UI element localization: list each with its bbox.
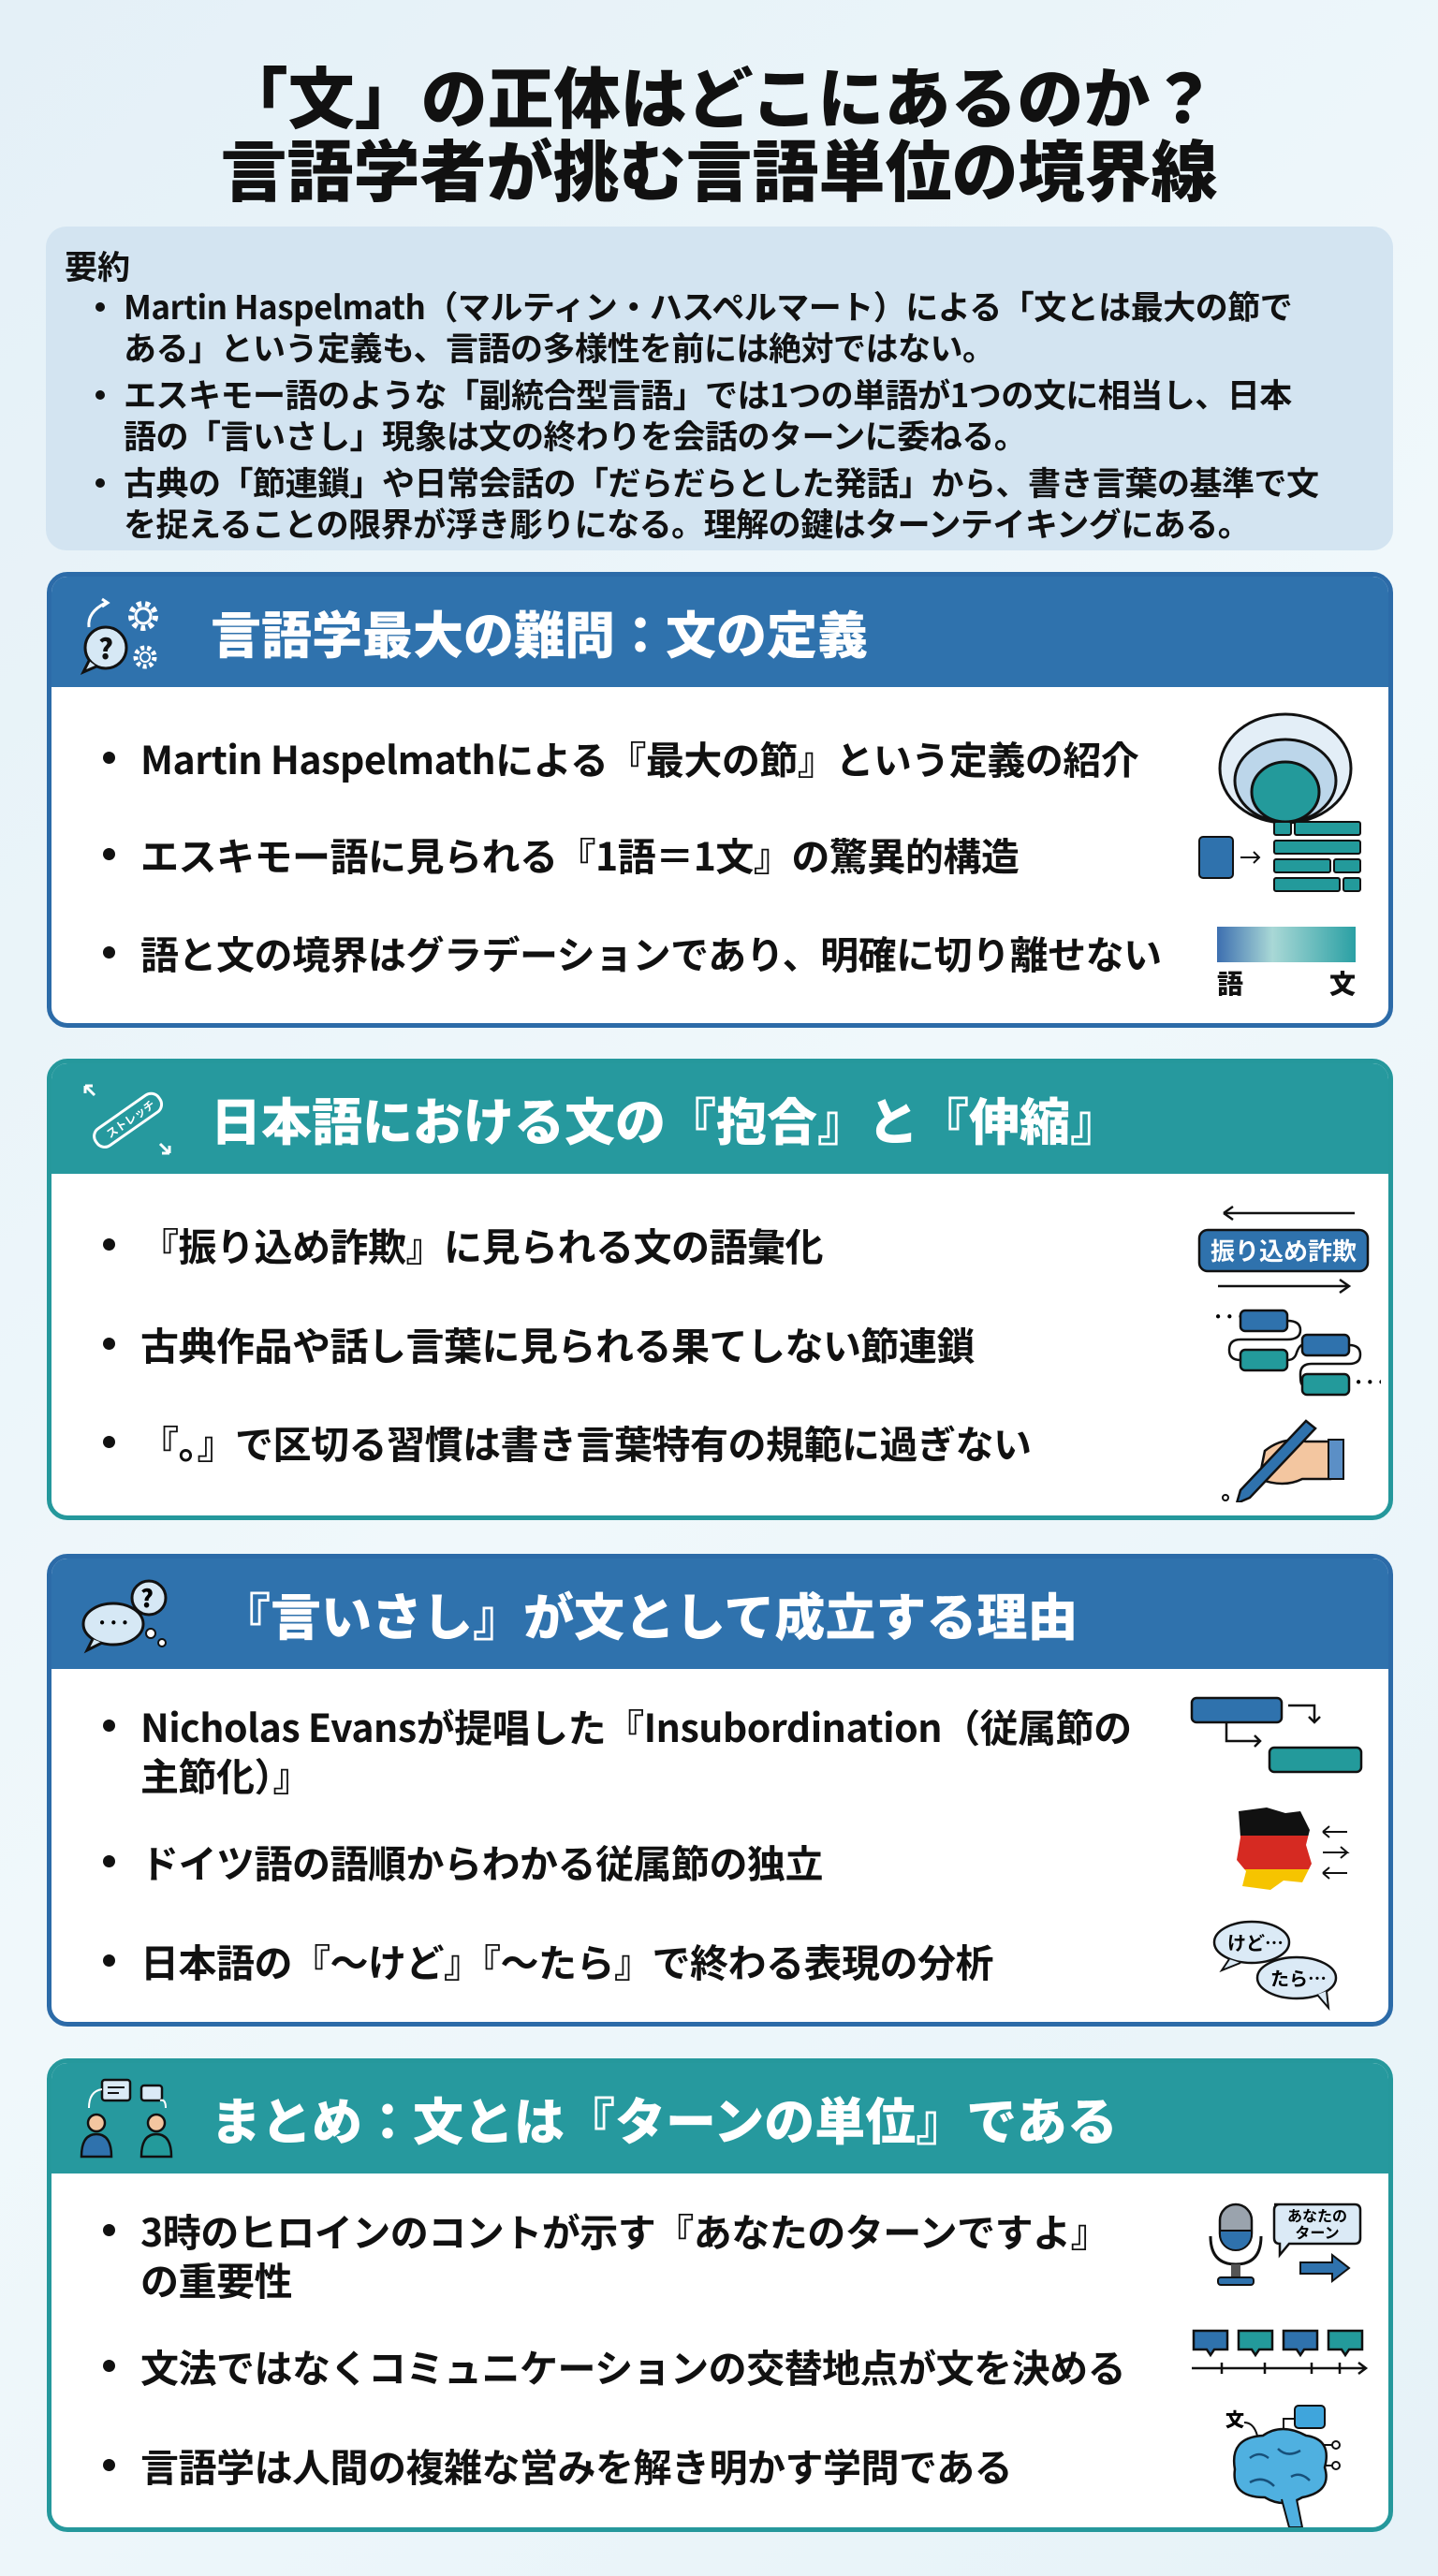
title: 言語学者が挑む言語単位の境界線 xyxy=(220,120,1217,215)
icon: thinking bubbles: ? xyxy=(140,1580,154,1615)
bullet 4-1: 3時のヒロインのコントが示す『あなたのターンですよ』の重要性 xyxy=(140,2202,1108,2306)
icon: conversation people xyxy=(81,2078,172,2159)
icon: microphone your turn: あなたの xyxy=(1287,2203,1347,2226)
panel: section 1 xyxy=(47,572,1393,1028)
bullet 3-3: 日本語の『～けど』『～たら』で終わる表現の分析 xyxy=(140,1932,993,1988)
header 4 xyxy=(51,2063,1388,2174)
header 3 xyxy=(51,1559,1388,1669)
icon: furikome label with arrows xyxy=(1198,1206,1369,1294)
header title 3: 『言いさし』が文として成立する理由 xyxy=(220,1576,1078,1650)
panel: section 2 xyxy=(47,1059,1393,1520)
icon: microphone your turn xyxy=(1210,2203,1361,2286)
icon: brain xyxy=(1225,2405,1341,2527)
panel: section 3 xyxy=(47,1554,1393,2027)
icon: gradient word-sentence: 語 xyxy=(1217,964,1243,1002)
bullet 2-2: 古典作品や話し言葉に見られる果てしない節連鎖 xyxy=(140,1315,975,1371)
icon: question gears: ? xyxy=(98,626,113,667)
icon: kedo tara bubbles: けど… xyxy=(1227,1928,1284,1955)
icon: turn timeline xyxy=(1192,2329,1368,2375)
icon: stretch xyxy=(84,1084,170,1155)
icon: kedo tara bubbles xyxy=(1213,1921,1337,2011)
icon: thinking bubbles xyxy=(82,1580,167,1653)
icon: brain: 文 xyxy=(1225,2405,1244,2432)
header title 2: 日本語における文の『抱合』と『伸縮』 xyxy=(211,1081,1121,1155)
bullet 1-1: Martin Haspelmathによる『最大の節』という定義の紹介 xyxy=(140,729,1138,785)
icon: nested clauses xyxy=(1219,713,1352,824)
summary bullets: 古典の「節連鎖」や日常会話の「だらだらとした発話」から、書き言葉の基準で文を捉えることの限界が浮き彫りになる。理解の鍵はターンテイキングにある。 xyxy=(124,458,1319,547)
bullet 1-3: 語と文の境界はグラデーションであり、明確に切り離せない xyxy=(140,924,1162,980)
icon: gradient word-sentence: 文 xyxy=(1329,964,1356,1002)
icon: gradient word-sentence xyxy=(1217,927,1356,1002)
bullet 4-3: 言語学は人間の複雑な営みを解き明かす学問である xyxy=(140,2437,1012,2493)
summary panel xyxy=(46,227,1393,550)
header title 1: 言語学最大の難問：文の定義 xyxy=(211,594,868,668)
header 1 xyxy=(51,577,1388,687)
icon: word to sentence blocks xyxy=(1198,821,1361,892)
icon: microphone your turn: ターン xyxy=(1295,2220,1340,2243)
icon: furikome label with arrows: 振り込め詐欺 xyxy=(1211,1233,1357,1267)
icon: thinking bubbles: ··· xyxy=(96,1608,131,1635)
summary bullets xyxy=(95,282,1319,547)
summary bullets: エスキモー語のような「副統合型言語」では1つの単語が1つの文に相当し、日本語の「言いさし」現象は文の終わりを会話のターンに委ねる。 xyxy=(124,370,1292,459)
bullet 3-2: ドイツ語の語順からわかる従属節の独立 xyxy=(140,1833,823,1889)
icon: writing hand xyxy=(1222,1419,1344,1502)
header 2 xyxy=(51,1063,1388,1174)
summary bullets: Martin Haspelmath（マルティン・ハスペルマート）による「文とは最大の節である」という定義も、言語の多様性を前には絶対ではない。 xyxy=(124,282,1292,371)
icon: question gears xyxy=(81,597,158,675)
panel: section 4 xyxy=(47,2058,1393,2532)
bullet 1-2: エスキモー語に見られる『1語＝1文』の驚異的構造 xyxy=(140,826,1019,882)
icon: clause chain xyxy=(1212,1305,1381,1397)
title xyxy=(220,47,1217,215)
icon: kedo tara bubbles: たら… xyxy=(1270,1964,1327,1991)
bullet 2-1: 『振り込め詐欺』に見られる文の語彙化 xyxy=(140,1216,823,1272)
icon: stretch: ストレッチ xyxy=(103,1096,158,1142)
bullet 3-1: Nicholas Evansが提唱した『Insubordination（従属節の主節化）』 xyxy=(140,1697,1132,1802)
icon: subordinate to main clause xyxy=(1191,1696,1363,1773)
header title 4: まとめ：文とは『ターンの単位』である xyxy=(211,2081,1118,2155)
bullet 4-2: 文法ではなくコミュニケーションの交替地点が文を決める xyxy=(140,2337,1125,2393)
bullet 2-3: 『。』で区切る習慣は書き言葉特有の規範に過ぎない xyxy=(140,1413,1032,1470)
summary heading: 要約 xyxy=(65,242,130,289)
title: 「文」の正体はどこにあるのか？ xyxy=(222,47,1216,142)
icon: germany word order xyxy=(1237,1808,1350,1890)
